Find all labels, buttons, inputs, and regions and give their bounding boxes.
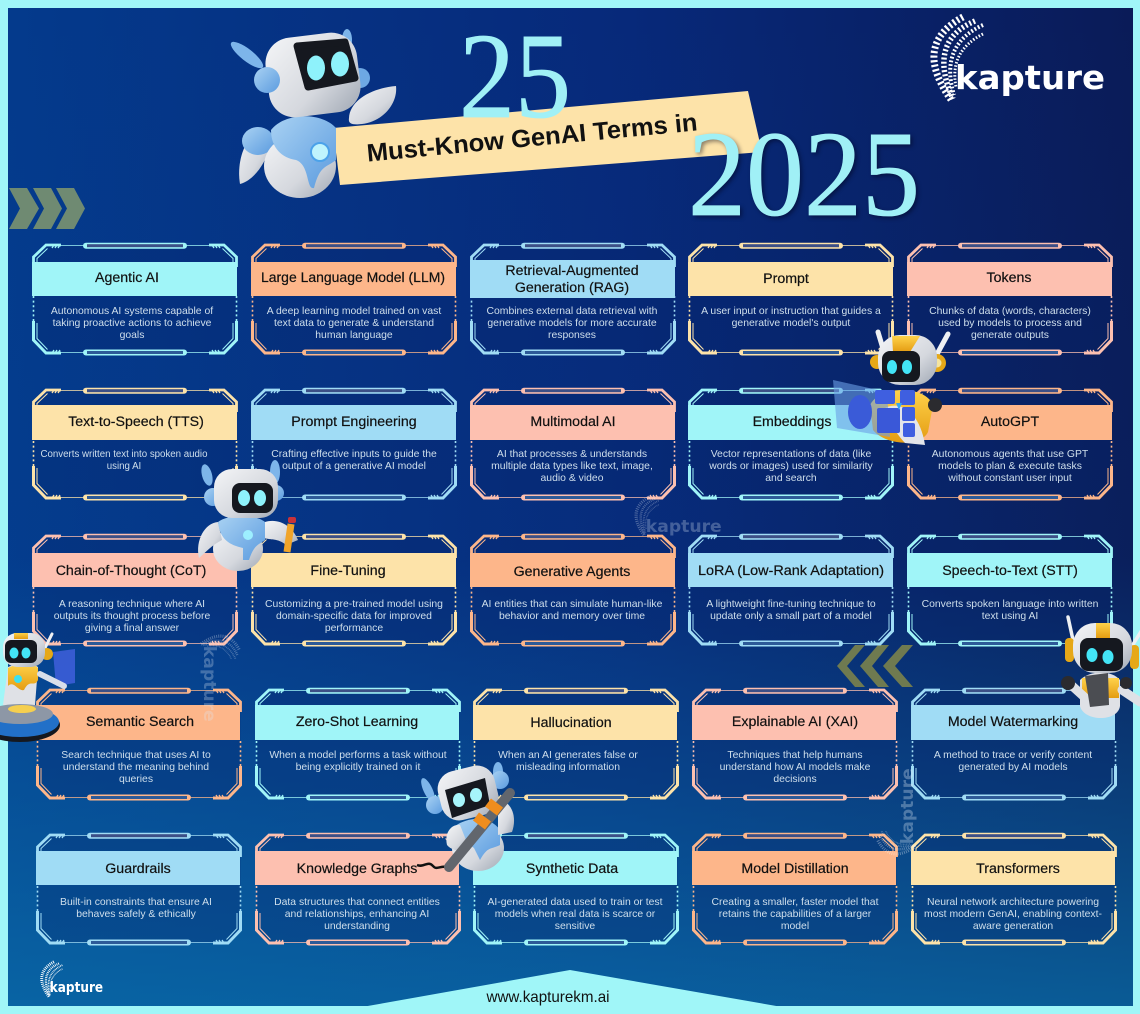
card: AutoGPT [907, 388, 1112, 500]
definition: Converts spoken language into written [922, 599, 1099, 610]
definition: generative models for more accurate [487, 318, 657, 329]
logo: kapture [934, 17, 1105, 101]
definition: Converts written text into spoken audio [41, 449, 207, 460]
term: Guardrails [105, 861, 171, 877]
footer: website tab: www.kapturekm.ai [486, 989, 610, 1006]
definition: text using AI [982, 611, 1038, 622]
term: Tokens [987, 270, 1031, 286]
card: RAG [470, 243, 675, 356]
arrow: chevrons pointing left [837, 645, 913, 687]
term: Model Distillation [741, 861, 849, 877]
definition: words or images) used for similarity [708, 461, 874, 472]
card: Model Distillation [692, 833, 896, 946]
term: Semantic Search [86, 714, 194, 730]
term: Hallucination [530, 715, 612, 731]
definition: A lightweight fine-tuning technique to [706, 599, 876, 610]
logo: small kapture footer: kapture [50, 980, 103, 996]
card: Large Language Model [251, 243, 456, 356]
definition: A user input or instruction that guides a [701, 306, 881, 317]
definition: giving a final answer [85, 623, 180, 634]
term: Model Watermarking [948, 714, 1078, 730]
definition: AI-generated data used to train or test [487, 897, 663, 908]
definition: Autonomous agents that use GPT [932, 449, 1089, 460]
card: Generative Agents [470, 534, 675, 646]
definition: AI entities that can simulate human-like [482, 599, 663, 610]
card: Speech-to-Text [907, 534, 1112, 646]
icon: blue robot with stylus and squiggle [417, 762, 514, 871]
card: Zero-Shot Learning [255, 688, 460, 800]
definition: Neural network architecture powering [927, 897, 1099, 908]
card: Multimodal AI [470, 388, 675, 500]
definition: Combines external data retrieval with [487, 306, 658, 317]
definition: responses [548, 330, 596, 341]
term: Speech-to-Text (STT) [942, 563, 1078, 579]
definition: understand how AI models make [720, 762, 871, 773]
card: Tokens [907, 243, 1112, 356]
watermark logo: right vertical [878, 768, 917, 854]
definition: audio & video [541, 473, 604, 484]
card: Embeddings [688, 388, 893, 500]
icon: yellow robot with phone [1061, 617, 1140, 718]
definition: sensitive [555, 921, 595, 932]
term: Large Language Model (LLM) [261, 270, 445, 286]
definition: misleading information [516, 762, 620, 773]
term: Zero-Shot Learning [296, 714, 418, 730]
definition: models to plan & execute tasks [938, 461, 1082, 472]
term: Generation (RAG) [515, 280, 629, 296]
card: Agentic AI [32, 243, 237, 356]
card: Guardrails [36, 833, 240, 946]
definition: Crafting effective inputs to guide the [271, 449, 437, 460]
card: Semantic Search [36, 688, 240, 800]
card: Chain-of-Thought [32, 534, 237, 646]
definition: Techniques that help humans [727, 750, 863, 761]
card: Hallucination [473, 688, 678, 800]
definition: models when real data is scarce or [495, 909, 656, 920]
definition: most modern GenAI, enabling context- [924, 909, 1102, 920]
term: Chain-of-Thought (CoT) [56, 563, 206, 579]
title number: 2025: 2025 [688, 107, 920, 242]
card: Text-to-Speech [32, 388, 237, 500]
term: Synthetic Data [526, 861, 618, 877]
icon: yellow robot with holographic tablet [833, 332, 948, 445]
icon: main waving robot [228, 29, 396, 198]
definition: Creating a smaller, faster model that [712, 897, 879, 908]
watermark logo: right vertical: kapture [898, 768, 917, 844]
term: Retrieval-Augmented [505, 263, 639, 279]
term: AutoGPT [981, 414, 1040, 430]
definition: A reasoning technique where AI [59, 599, 205, 610]
definition: taking proactive actions to achieve [53, 318, 212, 329]
term: Knowledge Graphs [297, 861, 417, 877]
term: Fine-Tuning [310, 563, 386, 579]
definition: behaves safely & ethically [76, 909, 197, 920]
icon: yellow robot on pedestal [0, 633, 75, 742]
definition: goals [120, 330, 144, 341]
title number: 25: 25 [459, 9, 571, 144]
definition: understanding [324, 921, 390, 932]
definition: behavior and memory over time [499, 611, 645, 622]
definition: multiple data types like text, image, [491, 461, 653, 472]
definition: A deep learning model trained on vast [267, 306, 441, 317]
definition: human language [315, 330, 393, 341]
definition: AI that processes & understands [497, 449, 647, 460]
card: Transformers [911, 833, 1116, 946]
definition: used by models to process and [938, 318, 1082, 329]
card: Knowledge Graphs [255, 833, 460, 946]
definition: performance [325, 623, 383, 634]
banner: subtitle strip [333, 91, 762, 185]
definition: and search [765, 473, 817, 484]
definition: Vector representations of data (like [711, 449, 871, 460]
footer: website tab [362, 970, 782, 1007]
definition: Chunks of data (words, characters) [929, 306, 1091, 317]
card: Synthetic Data [473, 833, 678, 946]
banner: subtitle strip: Must-Know GenAI Terms in [366, 108, 699, 168]
logo: small kapture footer [42, 962, 103, 997]
term: Explainable AI (XAI) [732, 714, 858, 730]
card: Prompt [688, 243, 893, 356]
definition: outputs its thought process before [54, 611, 210, 622]
term: Transformers [976, 861, 1060, 877]
definition: being explicitly trained on it [296, 762, 420, 773]
icon: blue robot with pencil [198, 460, 298, 571]
definition: queries [119, 774, 153, 785]
definition: Customizing a pre-trained model using [265, 599, 443, 610]
term: Multimodal AI [530, 414, 616, 430]
definition: domain-specific data for improved [276, 611, 432, 622]
card: Model Watermarking [911, 688, 1116, 800]
card: LoRA [688, 534, 893, 646]
definition: When a model performs a task without [269, 750, 447, 761]
definition: generative model's output [732, 318, 850, 329]
definition: using AI [107, 461, 141, 472]
definition: A method to trace or verify content [934, 750, 1092, 761]
definition: understand the meaning behind [63, 762, 209, 773]
definition: Autonomous AI systems capable of [51, 306, 213, 317]
card: Prompt Engineering [251, 388, 456, 500]
logo: kapture: kapture [955, 58, 1105, 97]
definition: and relationships, enhancing AI [285, 909, 429, 920]
watermark logo: centre: kapture [646, 517, 722, 536]
definition: without constant user input [947, 473, 1072, 484]
card: Explainable AI [692, 688, 896, 800]
watermark logo: centre [636, 497, 722, 536]
watermark logo: left vertical [200, 636, 239, 722]
definition: aware generation [973, 921, 1053, 932]
term: Text-to-Speech (TTS) [68, 414, 204, 430]
term: LoRA (Low-Rank Adaptation) [698, 563, 884, 579]
definition: Built-in constraints that ensure AI [60, 897, 212, 908]
card: Fine-Tuning [251, 534, 456, 646]
definition: Search technique that uses AI to [61, 750, 211, 761]
definition: Data structures that connect entities [274, 897, 440, 908]
definition: generated by AI models [958, 762, 1068, 773]
term: Generative Agents [514, 564, 630, 580]
definition: model [781, 921, 809, 932]
definition: text data to generate & understand [274, 318, 434, 329]
definition: retains the capabilities of a larger [719, 909, 872, 920]
definition: When an AI generates false or [498, 750, 638, 761]
definition: output of a generative AI model [282, 461, 426, 472]
term: Prompt [763, 271, 809, 287]
term: Prompt Engineering [291, 414, 417, 430]
watermark logo: left vertical: kapture [200, 646, 219, 722]
definition: generate outputs [971, 330, 1049, 341]
term: Embeddings [753, 414, 831, 430]
arrow: chevrons pointing right [9, 188, 85, 229]
definition: decisions [773, 774, 817, 785]
term: Agentic AI [95, 270, 159, 286]
definition: update only a small part of a model [710, 611, 872, 622]
